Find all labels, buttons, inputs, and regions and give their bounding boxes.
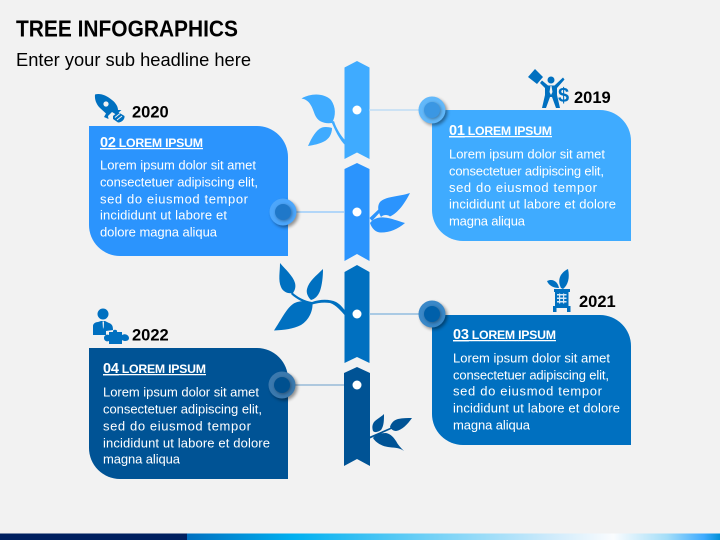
body text 02: sed do eiusmod tempor xyxy=(100,192,249,206)
trunk segment 1 xyxy=(344,61,370,159)
body text 04: consectetuer adipiscing elit, xyxy=(103,402,262,416)
title: TREE INFOGRAPHICS xyxy=(16,16,238,42)
icon: building with plant xyxy=(547,269,570,312)
leaves: branch 2 xyxy=(370,193,410,232)
panel: 03 xyxy=(432,315,631,445)
footer bar xyxy=(0,534,720,540)
node 03 xyxy=(418,300,448,330)
body text 04 xyxy=(103,384,270,466)
connector lines xyxy=(293,110,422,385)
body text 02: incididunt ut labore et xyxy=(100,208,227,222)
leaves: branch 4 xyxy=(370,414,412,451)
heading 02: 02 LOREM IPSUM xyxy=(100,135,203,151)
year 2021: 2021 xyxy=(579,293,616,311)
panel: 02 xyxy=(89,126,288,256)
trunk segment 2 xyxy=(344,163,370,261)
body text 03: magna aliqua xyxy=(453,418,531,432)
body text 03: consectetuer adipiscing elit, xyxy=(453,368,609,382)
body text 04: Lorem ipsum dolor sit amet xyxy=(103,384,259,400)
body text 02: dolore magna aliqua xyxy=(100,224,218,240)
panel: 04 xyxy=(89,348,288,479)
tree trunk xyxy=(344,61,370,466)
body text 01: consectetuer adipiscing elit, xyxy=(449,164,604,178)
trunk segment 4 xyxy=(344,367,370,466)
body text 03: sed do eiusmod tempor xyxy=(453,384,603,398)
node 04 xyxy=(268,372,298,400)
body text 01: sed do eiusmod tempor xyxy=(449,180,598,195)
heading 04: 04 LOREM IPSUM xyxy=(103,361,206,377)
heading 03: 03 LOREM IPSUM xyxy=(453,327,556,343)
leaves: branch 1 xyxy=(302,95,345,146)
body text 04: sed do eiusmod tempor xyxy=(103,418,252,434)
panel: 01 xyxy=(432,110,631,241)
body text 01: magna aliqua xyxy=(449,214,526,228)
body text 02 xyxy=(100,158,258,240)
node 02 xyxy=(270,198,298,228)
year 2022: 2022 xyxy=(132,326,169,344)
trunk segment 3 xyxy=(344,265,370,363)
icon: rocket xyxy=(95,94,125,122)
body text 01: Lorem ipsum dolor sit amet xyxy=(449,146,605,162)
year 2020: 2020 xyxy=(132,104,169,122)
subtitle: Enter your sub headline here xyxy=(16,50,251,70)
body text 02: consectetuer adipiscing elit, xyxy=(100,174,258,190)
year 2019: 2019 xyxy=(574,89,611,107)
leaves: branch 3 xyxy=(274,263,346,330)
body text 03: incididunt ut labore et dolore xyxy=(453,400,620,416)
body text 04: incididunt ut labore et dolore xyxy=(103,436,270,450)
body text 03: Lorem ipsum dolor sit amet xyxy=(453,350,610,366)
body text 01: incididunt ut labore et dolore xyxy=(449,196,616,212)
body text 01 xyxy=(449,146,616,228)
icon: businessman with briefcase and dollar xyxy=(528,69,569,108)
body text 02: Lorem ipsum dolor sit amet xyxy=(100,158,256,172)
body text 03 xyxy=(453,350,620,432)
icon: businessman with puzzle piece xyxy=(93,308,129,344)
heading 01: 01 LOREM IPSUM xyxy=(449,123,552,139)
body text 04: magna aliqua xyxy=(103,452,181,466)
node 01 xyxy=(418,96,448,126)
trunk dots xyxy=(352,106,362,390)
icon: businessman with briefcase and dollar: $ xyxy=(558,85,569,107)
